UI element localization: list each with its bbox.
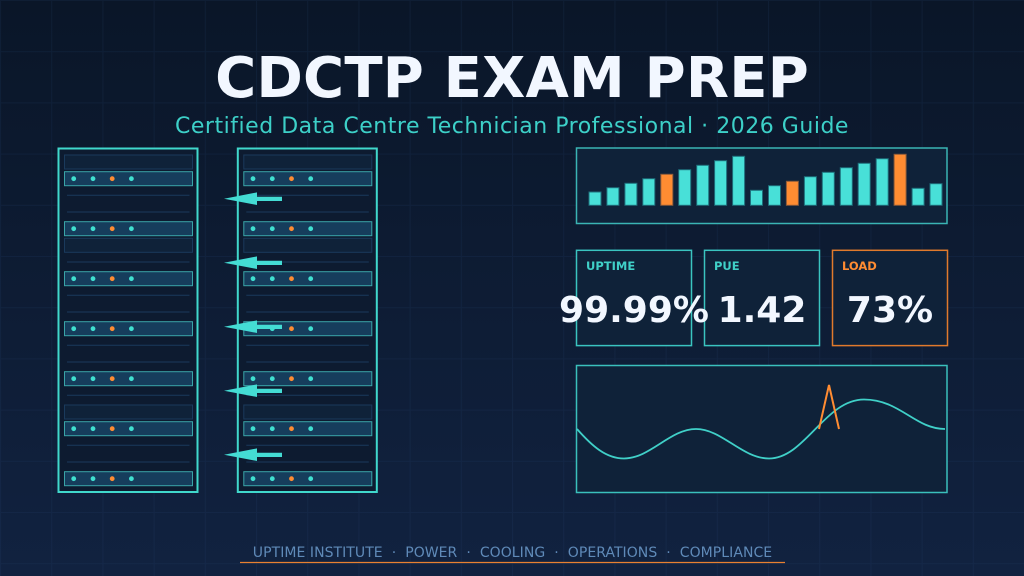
KPI card: load: 73% [847,290,933,331]
KPI card: uptime: UPTIME [586,259,635,273]
KPI card: PUE: PUE [714,259,740,273]
orange spike [819,385,839,429]
arrow: airflow 5 [224,448,282,461]
arrow: airflow 2 [224,256,282,269]
KPI card: PUE [704,250,820,346]
arrow: airflow 3 [224,320,282,333]
arrow: airflow 4 [224,384,282,397]
KPI card: load: LOAD [842,259,877,273]
title: CDCTP EXAM PREP [215,46,809,111]
KPI card: uptime: 99.99% [559,290,709,331]
line chart panel [576,366,947,492]
wave line [577,400,945,458]
panel: left server rack [58,148,198,492]
footer underline [240,562,785,564]
KPI card: uptime [559,250,709,346]
bar chart panel [576,148,947,224]
arrow: airflow 1 [224,192,282,205]
panel: right server rack [238,148,377,492]
footer text: UPTIME INSTITUTE · POWER · COOLING · OPERATIONS · COMPLIANCE [253,545,772,561]
KPI card: PUE: 1.42 [718,290,806,331]
KPI card: load [832,250,948,346]
subtitle: Certified Data Centre Technician Professional · 2026 Guide [175,114,849,139]
